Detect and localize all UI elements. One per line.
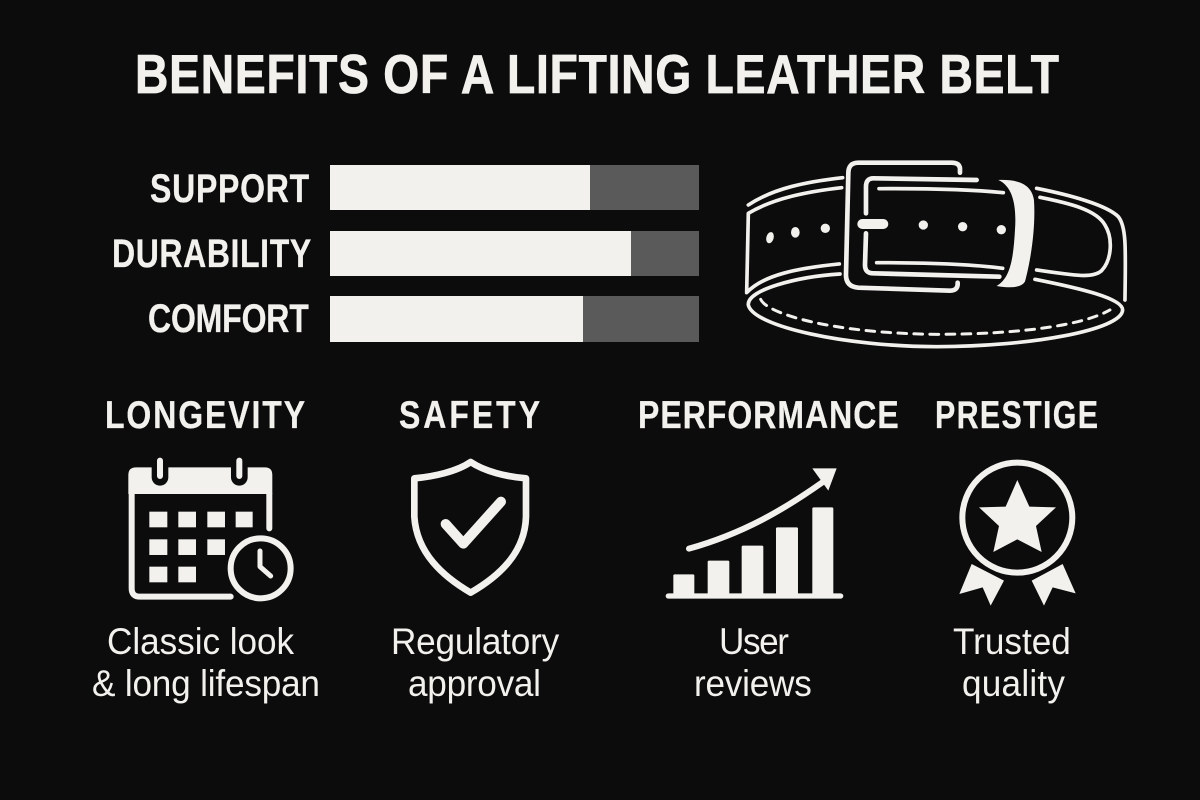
- icon: award badge with star: [959, 463, 1076, 606]
- bar row: comfort: [148, 296, 699, 342]
- description: safety: Regulatory: [391, 620, 559, 662]
- column: longevity: [92, 393, 320, 704]
- heading: safety: SAFETY: [399, 393, 540, 437]
- heading: prestige: PRESTIGE: [935, 393, 1098, 437]
- description: longevity: Classic look: [107, 620, 295, 662]
- icon: calendar with clock: [128, 460, 291, 598]
- description: performance: reviews: [694, 662, 812, 704]
- bar row: support: [150, 165, 699, 211]
- title: BENEFITS OF A LIFTING LEATHER BELT: [135, 43, 1059, 105]
- heading: performance: PERFORMANCE: [638, 393, 899, 437]
- description: safety: [391, 620, 559, 704]
- column: performance: [638, 393, 899, 704]
- bar row: durability: [112, 231, 699, 276]
- bar row: durability: DURABILITY: [112, 231, 311, 276]
- column: prestige: [935, 393, 1098, 704]
- description: safety: approval: [408, 662, 541, 704]
- description: prestige: [953, 620, 1071, 704]
- column: safety: [391, 393, 559, 704]
- heading: longevity: LONGEVITY: [105, 393, 305, 437]
- icon: leather belt: [747, 163, 1125, 347]
- bar row: comfort: COMFORT: [148, 296, 309, 341]
- bar row: support: SUPPORT: [150, 166, 309, 211]
- description: performance: User: [719, 620, 789, 662]
- description: performance: [694, 620, 812, 704]
- description: prestige: quality: [962, 662, 1065, 704]
- bar chart: belt qualities: [112, 165, 699, 342]
- icon: shield with check: [414, 462, 526, 593]
- description: longevity: & long lifespan: [92, 662, 320, 704]
- description: prestige: Trusted: [953, 620, 1071, 662]
- description: longevity: [92, 620, 320, 704]
- icon: rising bar chart with arrow: [666, 468, 843, 599]
